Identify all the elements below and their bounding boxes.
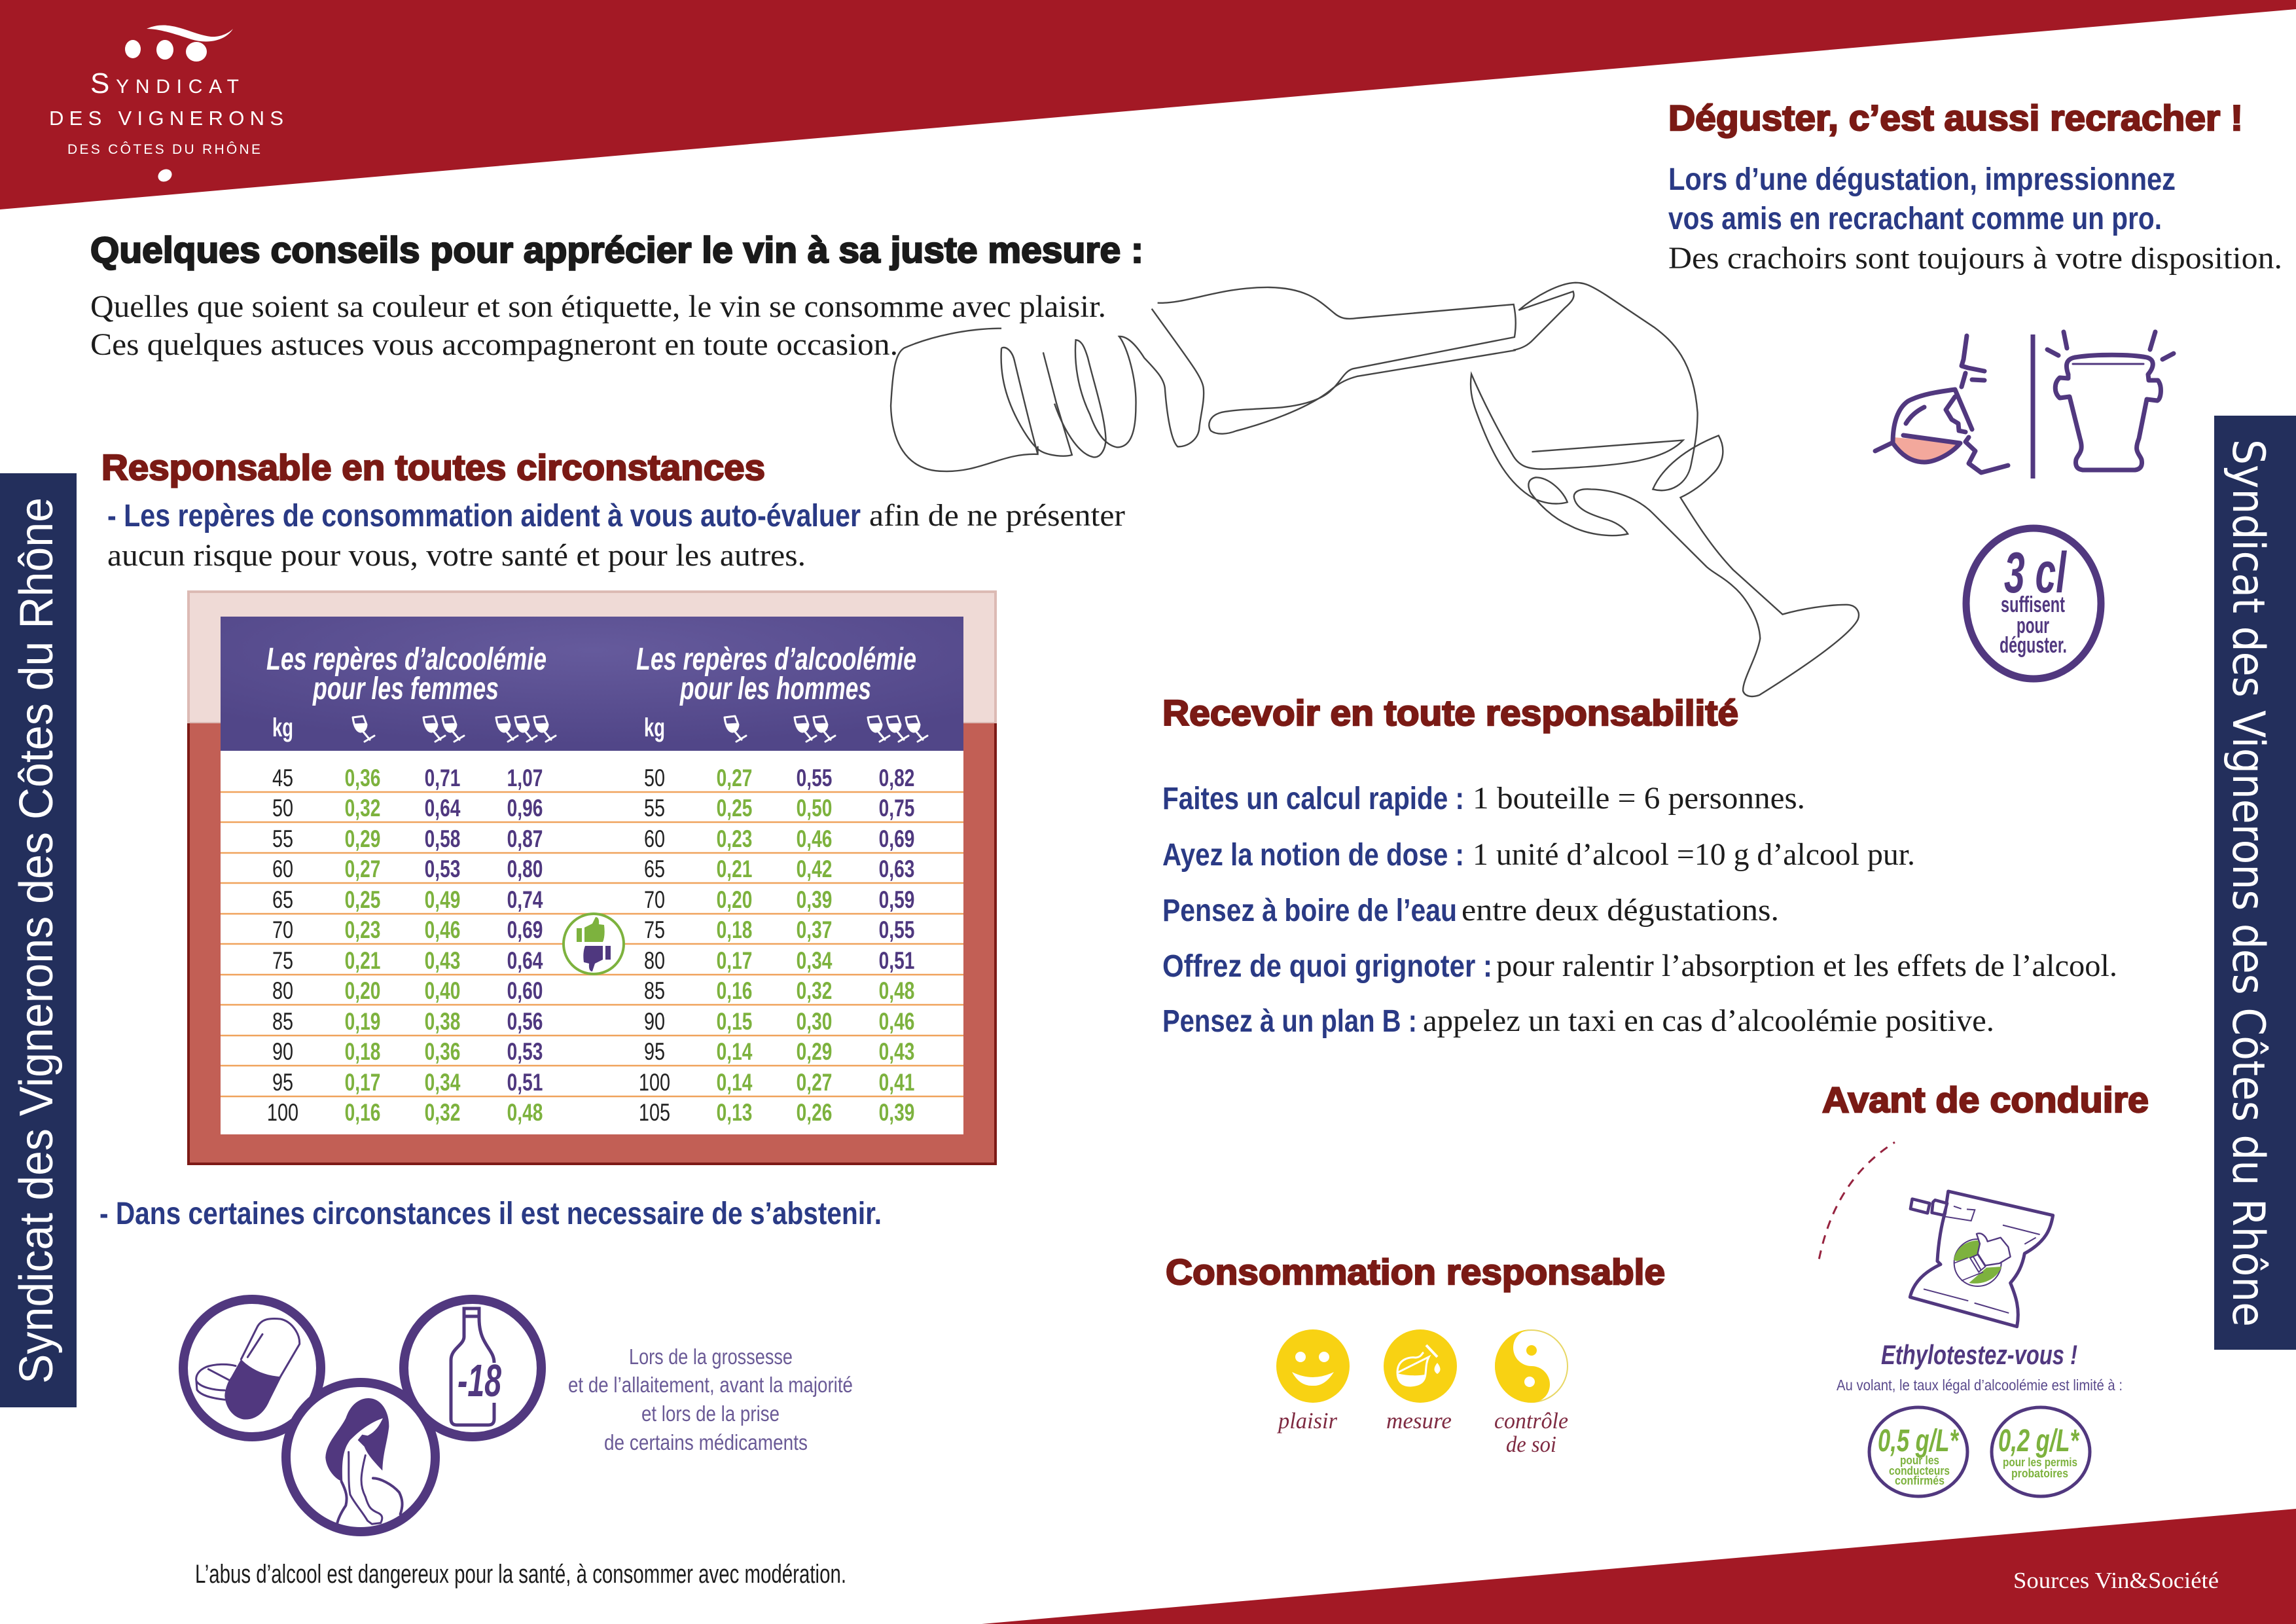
table body: 0,30 <box>797 1007 832 1035</box>
table body: 0,18 <box>345 1038 380 1065</box>
text: déguster: Lors d’une dégustation, impressionnez <box>1668 162 2176 197</box>
badge: 3 cl: déguster. <box>2000 633 2067 658</box>
table body: 0,37 <box>797 916 832 943</box>
table body: 0,63 <box>879 855 914 882</box>
text: s'abstenir: - Dans certaines circonstances il est necessaire de s’abstenir. <box>99 1197 882 1231</box>
list: recevoir <box>1162 781 2117 1039</box>
list: recevoir: entre deux dégustations. <box>1462 893 1779 928</box>
text: repères de consommation: aucun risque pour vous, votre santé et pour les autres. <box>107 538 806 573</box>
table body: 0,27 <box>797 1068 832 1096</box>
badge: 0,2 g/L <box>1992 1407 2090 1496</box>
table body: 0,38 <box>425 1007 460 1035</box>
table body: 0,51 <box>879 947 914 974</box>
table body: 0,13 <box>717 1098 752 1126</box>
table body: 0,17 <box>345 1068 380 1096</box>
table header: pour les femmes <box>312 672 499 706</box>
heading: Déguster: Déguster, c’est aussi recracher ! <box>1668 98 2243 138</box>
table body <box>221 751 963 1134</box>
table body: 0,18 <box>717 916 752 943</box>
icon: smiley <box>1276 1329 1350 1403</box>
icon: pregnant woman <box>286 1382 435 1532</box>
table body: 75 <box>644 917 665 944</box>
heading: Responsable en toutes circonstances: Responsable en toutes circonstances <box>101 447 765 488</box>
icon: bottle -18 <box>404 1299 541 1437</box>
icon: spitting and spittoon <box>1875 332 2174 478</box>
table body: 0,21 <box>717 855 752 882</box>
icon: pills <box>183 1299 321 1437</box>
table body: 0,36 <box>345 764 380 791</box>
table body: 55 <box>644 795 665 822</box>
intro text <box>90 289 1106 362</box>
heading: Recevoir: Recevoir en toute responsabilité <box>1162 693 1738 733</box>
heading: Consommation responsable: Consommation responsable <box>1166 1252 1665 1292</box>
table body: 0,43 <box>879 1038 914 1065</box>
table body: 90 <box>644 1009 665 1036</box>
logo: Syndicat des Vignerons: DES CÔTES DU RHÔNE <box>67 142 260 157</box>
table body: 0,43 <box>425 947 460 974</box>
table body: 0,41 <box>879 1068 914 1096</box>
icon: breathalyser bag <box>1819 1142 2053 1327</box>
icon: yin yang <box>1495 1329 1568 1403</box>
list: recevoir: Faites un calcul rapide : <box>1162 782 1464 816</box>
intro text: Ces quelques astuces vous accompagneront en toute occasion. <box>90 327 898 362</box>
labels: contrôle <box>1494 1408 1568 1434</box>
table body: 0,39 <box>797 886 832 913</box>
badge: 3 cl: pour <box>2017 613 2049 638</box>
top red band <box>0 0 2296 209</box>
badge: 0,5 g/L: confirmés <box>1895 1474 1945 1487</box>
table body: 0,50 <box>797 794 832 821</box>
badge: 0,2 g/L: pour les permis <box>2003 1456 2077 1469</box>
table body: 0,20 <box>717 886 752 913</box>
table body: 0,82 <box>879 764 914 791</box>
table body: 0,23 <box>717 825 752 852</box>
text: abstention cases: et de l’allaitement, avant la majorité <box>568 1373 853 1397</box>
text: Ethylotestez-vous: Ethylotestez-vous ! <box>1881 1339 2077 1370</box>
table body: 85 <box>644 978 665 1005</box>
badge: 0,2 g/L: 0,2 g/L* <box>1998 1424 2080 1458</box>
table body: 0,16 <box>717 977 752 1004</box>
labels: de soi <box>1506 1432 1556 1457</box>
list: recevoir: Ayez la notion de dose : <box>1162 838 1464 873</box>
table body: 95 <box>644 1039 665 1066</box>
table header: kg <box>644 713 665 742</box>
table header <box>221 617 963 751</box>
table body: 0,32 <box>425 1098 460 1126</box>
panel: table of alcohol levels <box>188 592 996 1164</box>
table body: 0,96 <box>507 794 543 821</box>
table body: 50 <box>272 795 293 822</box>
logo: Syndicat des Vignerons <box>49 26 283 184</box>
table header: Les repères d’alcoolémie <box>266 642 547 677</box>
table body: 0,32 <box>797 977 832 1004</box>
badge: 0,2 g/L: probatoires <box>2011 1467 2068 1480</box>
heading: Avant de conduire: Avant de conduire <box>1822 1079 2149 1120</box>
right vertical band <box>2214 416 2296 1350</box>
table body: 0,27 <box>717 764 752 791</box>
text: abstention cases: de certains médicaments <box>604 1430 808 1454</box>
logo: Syndicat des Vignerons: DES VIGNERONS <box>49 107 283 130</box>
left vertical band: Syndicat des Vignerons des Côtes du Rhône <box>10 497 63 1384</box>
badge: 0,5 g/L <box>1869 1407 1967 1496</box>
table body: 70 <box>272 917 293 944</box>
table body: 0,25 <box>345 886 380 913</box>
table body: 0,53 <box>425 855 460 882</box>
table body: 0,36 <box>425 1038 460 1065</box>
table body: 105 <box>639 1100 670 1127</box>
table body: 0,39 <box>879 1098 914 1126</box>
table header: kg <box>272 713 293 742</box>
list: recevoir: Pensez à un plan B : <box>1162 1004 1417 1039</box>
text: repères de consommation <box>107 498 1125 573</box>
table body: 70 <box>644 887 665 914</box>
health warning: L’abus d’alcool est dangereux pour la santé, à consommer avec modération. <box>195 1560 846 1589</box>
table body: 0,40 <box>425 977 460 1004</box>
table body: 95 <box>272 1070 293 1096</box>
table body: 0,14 <box>717 1068 753 1096</box>
badge: 3 cl: suffisent <box>2001 592 2065 617</box>
table body: 0,59 <box>879 886 914 913</box>
list: recevoir: Offrez de quoi grignoter : <box>1162 949 1492 984</box>
icon group: three abstention circles <box>183 1299 541 1532</box>
table body: 100 <box>639 1070 670 1096</box>
table body: 0,58 <box>425 825 460 852</box>
bottom red band <box>982 1509 2296 1624</box>
table body: 0,29 <box>345 825 380 852</box>
table body: 0,25 <box>717 794 752 821</box>
table body: 75 <box>272 948 293 975</box>
table body: 0,53 <box>507 1038 543 1065</box>
table body: 1,07 <box>507 764 543 791</box>
table body: 0,74 <box>507 886 543 913</box>
table body: 0,27 <box>345 855 380 882</box>
badge: 0,5 g/L: conducteurs <box>1889 1464 1950 1477</box>
labels: mesure <box>1386 1408 1452 1434</box>
table body: 80 <box>272 978 293 1005</box>
table body: 0,56 <box>507 1007 543 1035</box>
table body: 60 <box>644 826 665 853</box>
table body: 0,64 <box>425 794 461 821</box>
badge: 0,5 g/L: 0,5 g/L* <box>1878 1424 1960 1458</box>
hand and bottle <box>891 287 1516 471</box>
left vertical band <box>0 473 77 1407</box>
table body: 50 <box>644 765 665 792</box>
list: recevoir: appelez un taxi en cas d’alcoolémie positive. <box>1423 1003 1994 1038</box>
table body: 0,69 <box>879 825 914 852</box>
table header: pour les hommes <box>679 672 871 706</box>
table body: 0,51 <box>507 1068 543 1096</box>
sources: Sources Vin&Société <box>2013 1568 2219 1593</box>
wine glass <box>1471 283 1859 696</box>
table body: 0,75 <box>879 794 914 821</box>
table body: 55 <box>272 826 293 853</box>
table body: 0,20 <box>345 977 380 1004</box>
table body: 0,48 <box>879 977 914 1004</box>
icon: bottle -18: -18 <box>457 1355 501 1406</box>
text: repères de consommation: afin de ne présenter <box>869 498 1125 533</box>
table body: 0,49 <box>425 886 460 913</box>
list: recevoir: 1 bouteille = 6 personnes. <box>1473 781 1805 816</box>
text: déguster: Des crachoirs sont toujours à votre disposition. <box>1668 241 2282 276</box>
table body: 0,15 <box>717 1007 752 1035</box>
right vertical band: Syndicat des Vignerons des Côtes du Rhône <box>2222 439 2274 1327</box>
table body: 65 <box>644 856 665 883</box>
table body: 0,46 <box>425 916 460 943</box>
text: déguster: vos amis en recrachant comme un pro. <box>1668 202 2162 236</box>
table body: 0,34 <box>797 947 833 974</box>
logo: Syndicat des Vignerons: S YNDICAT <box>90 67 239 99</box>
table body: 60 <box>272 856 293 883</box>
text: déguster <box>1668 162 2282 276</box>
table body: 0,26 <box>797 1098 832 1126</box>
table body: 0,64 <box>507 947 543 974</box>
table body: 0,60 <box>507 977 543 1004</box>
table body: 80 <box>644 948 665 975</box>
labels: plaisir <box>1276 1408 1337 1434</box>
text: repères de consommation: - Les repères de consommation aident à vous auto-évaluer <box>107 499 861 533</box>
badge: 3 cl: 3 cl <box>2004 540 2067 605</box>
table body: 0,32 <box>345 794 380 821</box>
main title: Quelques conseils pour apprécier le vin à sa juste mesure : <box>90 229 1143 270</box>
table body: 90 <box>272 1039 293 1066</box>
table body: 0,71 <box>425 764 460 791</box>
text: legal limit: Au volant, le taux légal d’alcoolémie est limité à : <box>1837 1377 2123 1394</box>
table body: 0,34 <box>425 1068 461 1096</box>
table body: 0,55 <box>879 916 914 943</box>
badge: 0,5 g/L: pour les <box>1900 1454 1939 1467</box>
icon: measure <box>1384 1329 1457 1403</box>
table body: 0,17 <box>717 947 752 974</box>
text: abstention cases: Lors de la grossesse <box>629 1344 793 1369</box>
line art: hand pouring bottle into a glass <box>891 283 1859 696</box>
table body: 0,42 <box>797 855 832 882</box>
table body: 65 <box>272 887 293 914</box>
table header: Les repères d’alcoolémie <box>636 642 916 677</box>
table body: 0,14 <box>717 1038 753 1065</box>
list: recevoir: Pensez à boire de l’eau <box>1162 893 1457 928</box>
table body: 0,21 <box>345 947 380 974</box>
icon: thumbs up and down <box>564 914 624 974</box>
table body: 0,48 <box>507 1098 543 1126</box>
text: abstention cases: et lors de la prise <box>641 1401 780 1426</box>
table body: 0,87 <box>507 825 543 852</box>
labels <box>1276 1408 1568 1457</box>
table body: 0,23 <box>345 916 380 943</box>
list: recevoir: 1 unité d’alcool =10 g d’alcool pur. <box>1473 837 1915 872</box>
table body: 0,19 <box>345 1007 380 1035</box>
table body: 0,80 <box>507 855 543 882</box>
table body: 0,46 <box>797 825 832 852</box>
list: recevoir: pour ralentir l’absorption et les effets de l’alcool. <box>1496 948 2117 983</box>
table body: 45 <box>272 765 293 792</box>
badge: 3 cl <box>1966 528 2101 679</box>
table body: 0,55 <box>797 764 832 791</box>
table body: 0,16 <box>345 1098 380 1126</box>
intro text: Quelles que soient sa couleur et son étiquette, le vin se consomme avec plaisir. <box>90 289 1106 324</box>
table body: 0,46 <box>879 1007 914 1035</box>
table body: 85 <box>272 1009 293 1036</box>
text: abstention cases <box>568 1344 853 1454</box>
table body: 0,69 <box>507 916 543 943</box>
table body: 0,29 <box>797 1038 832 1065</box>
icons: plaisir, mesure, contrôle de soi <box>1276 1329 1568 1457</box>
table body: 100 <box>267 1100 298 1127</box>
